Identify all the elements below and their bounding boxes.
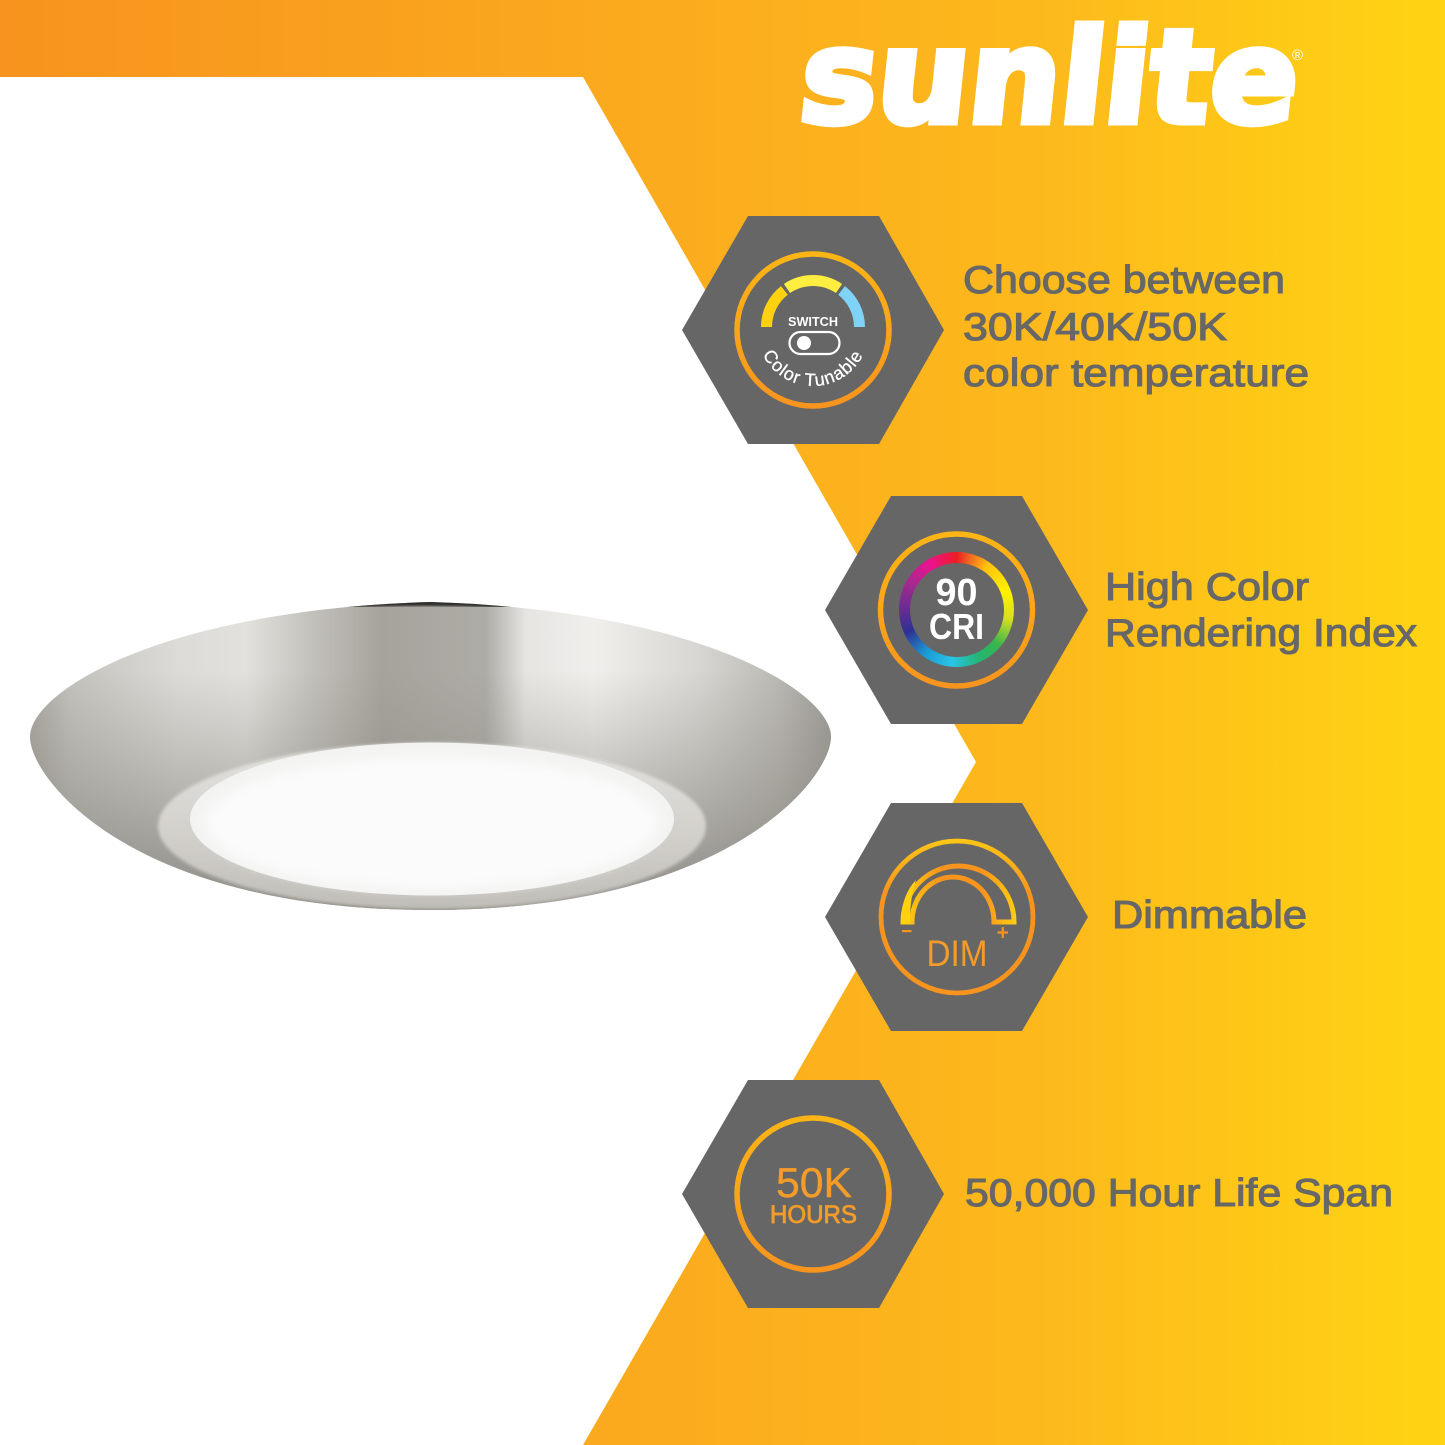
minus sign: [902, 930, 912, 932]
text: high CRI: High Color: [1105, 566, 1309, 609]
badge: dimmable: [825, 803, 1088, 1031]
text: color temperature: Choose between: [963, 259, 1285, 302]
tuning arcs: [766, 281, 860, 327]
hours label: HOURS: [770, 1201, 857, 1229]
dim label: DIM: [926, 933, 988, 974]
product photo: disk light fixture: [30, 602, 831, 910]
text: color temperature: [963, 259, 1309, 395]
plus sign: [998, 927, 1008, 938]
cri value: 90: [936, 572, 978, 614]
switch label: SWITCH: [788, 315, 838, 329]
text: high CRI: [1105, 566, 1418, 655]
50K label: 50K: [776, 1159, 852, 1206]
dimmer arch: [901, 866, 1014, 924]
ring centre: [910, 562, 1004, 656]
text: color temperature: color temperature: [963, 352, 1309, 395]
fixture body: [20, 595, 840, 915]
text: high CRI: Rendering Index: [1105, 612, 1418, 655]
curved label: Color Tunable: [764, 350, 862, 386]
badge: color tunable: [682, 216, 944, 444]
inner trim ring: [158, 743, 706, 909]
logo: sunlite: ®: [1292, 47, 1303, 64]
cri value: CRI: [929, 606, 984, 647]
text: color temperature: 30K/40K/50K: [963, 306, 1227, 349]
text: dimmable: Dimmable: [1112, 894, 1307, 937]
frosted lens: [190, 742, 674, 896]
rainbow ring: [899, 552, 1014, 667]
toggle: [790, 332, 840, 354]
badge: 50K hours: [682, 1080, 944, 1308]
cri value: [929, 572, 984, 647]
badge: 90 CRI: [825, 496, 1088, 724]
text: life span: 50,000 Hour Life Span: [965, 1172, 1393, 1215]
dark top edge: [345, 602, 525, 606]
